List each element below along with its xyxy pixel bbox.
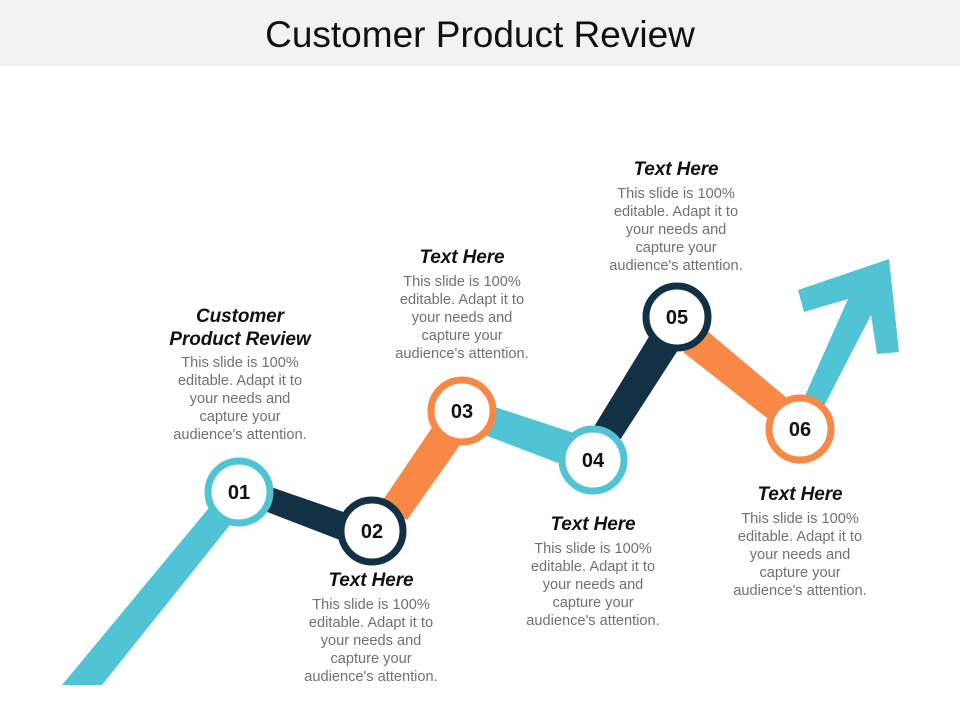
text block 02: capture your <box>330 651 412 667</box>
segment: navy 04 to 05 <box>592 335 678 440</box>
text block 06: capture your <box>759 565 841 581</box>
node 02: 02 <box>361 521 383 543</box>
segment: navy 01 to 02 <box>262 486 352 542</box>
node 04: 04 <box>582 450 605 472</box>
text block 01: your needs and <box>190 391 290 407</box>
text block 05: This slide is 100% <box>617 186 735 202</box>
text block 03: your needs and <box>412 310 512 326</box>
arrow: teal upward arrow <box>798 259 899 406</box>
node 05: 05 <box>666 307 688 329</box>
text block 06: editable. Adapt it to <box>738 529 862 545</box>
text block 01: Product Review <box>169 329 311 350</box>
text block 02: audience's attention. <box>304 669 438 685</box>
text block 02 <box>304 570 438 685</box>
text block 05: Text Here <box>634 159 718 180</box>
text block 03: This slide is 100% <box>403 274 521 290</box>
text block 01: Customer <box>196 306 284 327</box>
text block 06: your needs and <box>750 547 850 563</box>
node 03: 03 <box>451 401 473 423</box>
node 01: 01 <box>228 482 250 504</box>
text block 06: This slide is 100% <box>741 511 859 527</box>
text block 04: your needs and <box>543 577 643 593</box>
text block 03: editable. Adapt it to <box>400 292 524 308</box>
text block 03 <box>395 247 529 362</box>
title: Customer Product Review <box>265 14 695 55</box>
text block 02: Text Here <box>328 570 414 591</box>
text block 04: audience's attention. <box>526 613 660 629</box>
text block 01 <box>169 306 312 443</box>
text block 02: This slide is 100% <box>312 597 430 613</box>
text block 04: Text Here <box>550 514 636 535</box>
node 02 <box>341 500 403 562</box>
node 04 <box>562 429 624 491</box>
title band <box>0 0 960 66</box>
node 06 <box>769 398 831 460</box>
text block 06: audience's attention. <box>733 583 867 599</box>
text block 02: your needs and <box>321 633 421 649</box>
node 05 <box>646 286 708 348</box>
node 06: 06 <box>789 419 811 441</box>
text block 03: audience's attention. <box>395 346 529 362</box>
segment: teal 03 to 04 <box>482 406 574 463</box>
segment: orange 05 to 06 <box>683 330 787 418</box>
node 01 <box>208 461 270 523</box>
text block 02: editable. Adapt it to <box>309 615 433 631</box>
text block 05: audience's attention. <box>609 258 743 274</box>
text block 01: audience's attention. <box>173 427 307 443</box>
text block 05: capture your <box>635 240 717 256</box>
text block 05 <box>609 159 743 274</box>
text block 01: capture your <box>199 409 281 425</box>
node 03 <box>431 380 493 442</box>
text block 03: Text Here <box>420 247 504 268</box>
text block 04: capture your <box>552 595 634 611</box>
text block 01: editable. Adapt it to <box>178 373 302 389</box>
text block 04: This slide is 100% <box>534 541 652 557</box>
text block 05: your needs and <box>626 222 726 238</box>
text block 04 <box>526 514 660 629</box>
text block 01: This slide is 100% <box>181 355 299 371</box>
text block 06: Text Here <box>758 484 842 505</box>
segment: teal tail <box>62 503 230 685</box>
text block 03: capture your <box>421 328 503 344</box>
text block 05: editable. Adapt it to <box>614 204 738 220</box>
text block 06 <box>733 484 867 599</box>
text block 04: editable. Adapt it to <box>531 559 655 575</box>
segment: orange 02 to 03 <box>381 426 460 520</box>
